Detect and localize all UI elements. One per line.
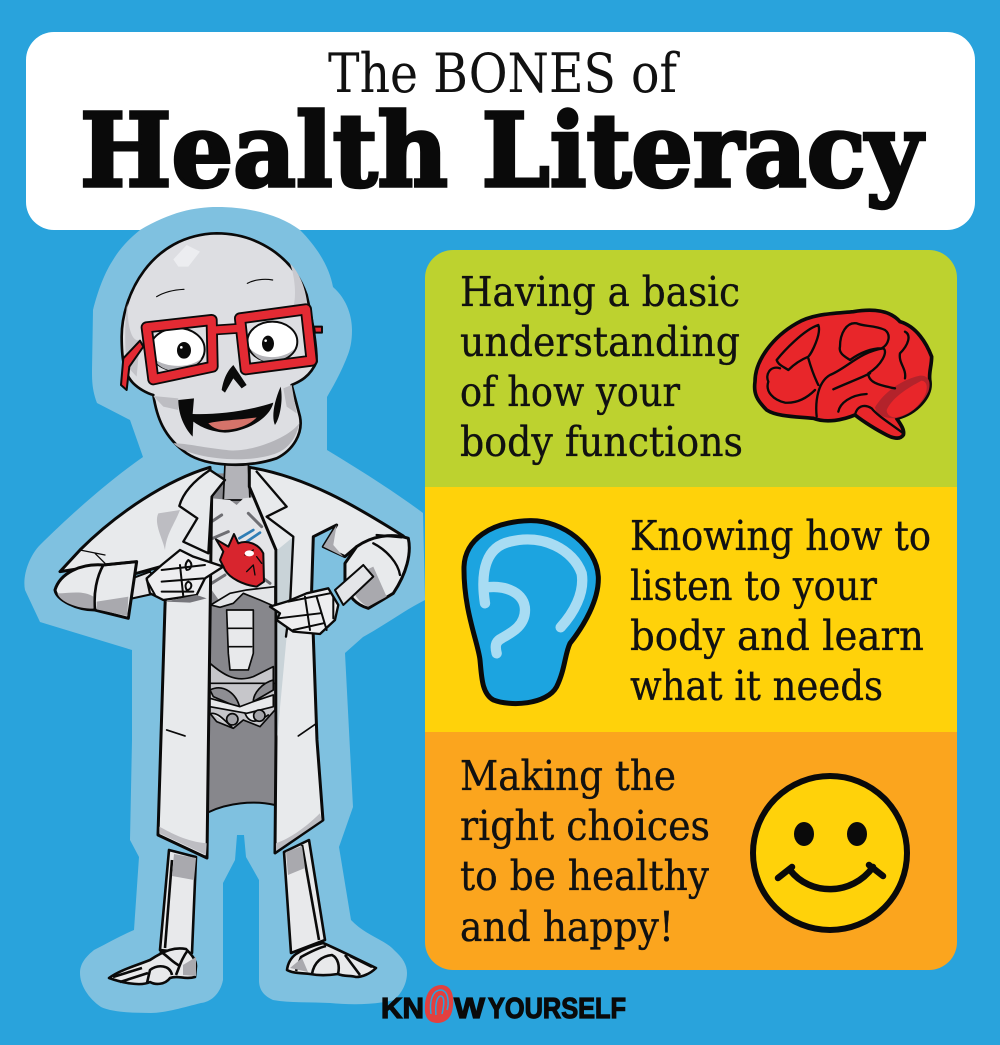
right foot (287, 943, 376, 977)
arm bone left (123, 572, 163, 600)
skeleton halo (24, 207, 425, 1013)
head (121, 233, 322, 465)
text: listen to your body: listen to your (630, 562, 877, 610)
panel: listening (yellow) (425, 487, 957, 732)
neck (223, 463, 250, 500)
cheek shading (153, 385, 297, 413)
text: right choices: Making the (460, 752, 676, 800)
mouth (178, 387, 282, 437)
glasses (121, 309, 322, 390)
panel: healthy choices (orange) (425, 732, 957, 970)
skull (122, 233, 317, 410)
text: right choices: and happy! (460, 903, 674, 951)
open torso interior (209, 473, 276, 812)
gray hem line (209, 803, 275, 812)
text: body functions: of how your (460, 368, 680, 416)
left hand (147, 550, 223, 603)
left eye (150, 328, 205, 371)
skeleton legs (109, 840, 376, 984)
coat left lapel (179, 470, 225, 553)
icon: ear (464, 521, 598, 704)
text: listen to your body: body and learn (630, 612, 924, 660)
icon: smiley (753, 776, 907, 930)
text: body functions: Having a basic (460, 268, 740, 316)
text: right choices: to be healthy (460, 852, 710, 900)
tongue (208, 417, 257, 430)
ribcage (212, 497, 276, 602)
right toe lines (296, 946, 372, 975)
character: skeleton doctor (55, 233, 409, 984)
logo: Know Yourself: KN (381, 993, 424, 1025)
logo: Know Yourself (381, 985, 626, 1025)
title panel (26, 32, 975, 230)
jaw (153, 385, 301, 465)
text: body functions (460, 268, 743, 466)
panel: body knowledge (green) (425, 250, 957, 487)
coat left panel (60, 467, 212, 858)
text: body functions: understanding (460, 318, 740, 366)
left toe lines (113, 950, 188, 983)
coat right panel (249, 467, 403, 853)
spine (227, 610, 253, 670)
text: right choices (460, 752, 710, 951)
text: listen to your body (630, 512, 931, 710)
icon: heart (216, 530, 264, 587)
logo: Know Yourself: W (454, 993, 486, 1025)
pelvis (210, 683, 275, 728)
right forearm bone (335, 565, 373, 605)
title line 2: Health Literacy (80, 91, 925, 210)
icon: brain (755, 310, 932, 438)
icon: fingerprint O (425, 985, 453, 1023)
text: listen to your body: Knowing how to (630, 512, 931, 560)
left foot (109, 948, 196, 984)
text: listen to your body: what it needs (630, 662, 883, 710)
right cuff (345, 535, 409, 608)
forehead highlight (173, 245, 200, 267)
text: right choices: right choices (460, 802, 710, 850)
nose (222, 365, 247, 393)
left cuff (55, 562, 137, 618)
right hand (270, 588, 338, 634)
torso and coat (55, 463, 409, 858)
logo: Know Yourself: YOURSELF (488, 993, 626, 1025)
coat right facing (277, 537, 293, 737)
title line 1: The BONES of (328, 42, 681, 105)
brows (157, 279, 273, 297)
text: body functions: body functions (460, 418, 743, 466)
right eye (247, 322, 297, 362)
